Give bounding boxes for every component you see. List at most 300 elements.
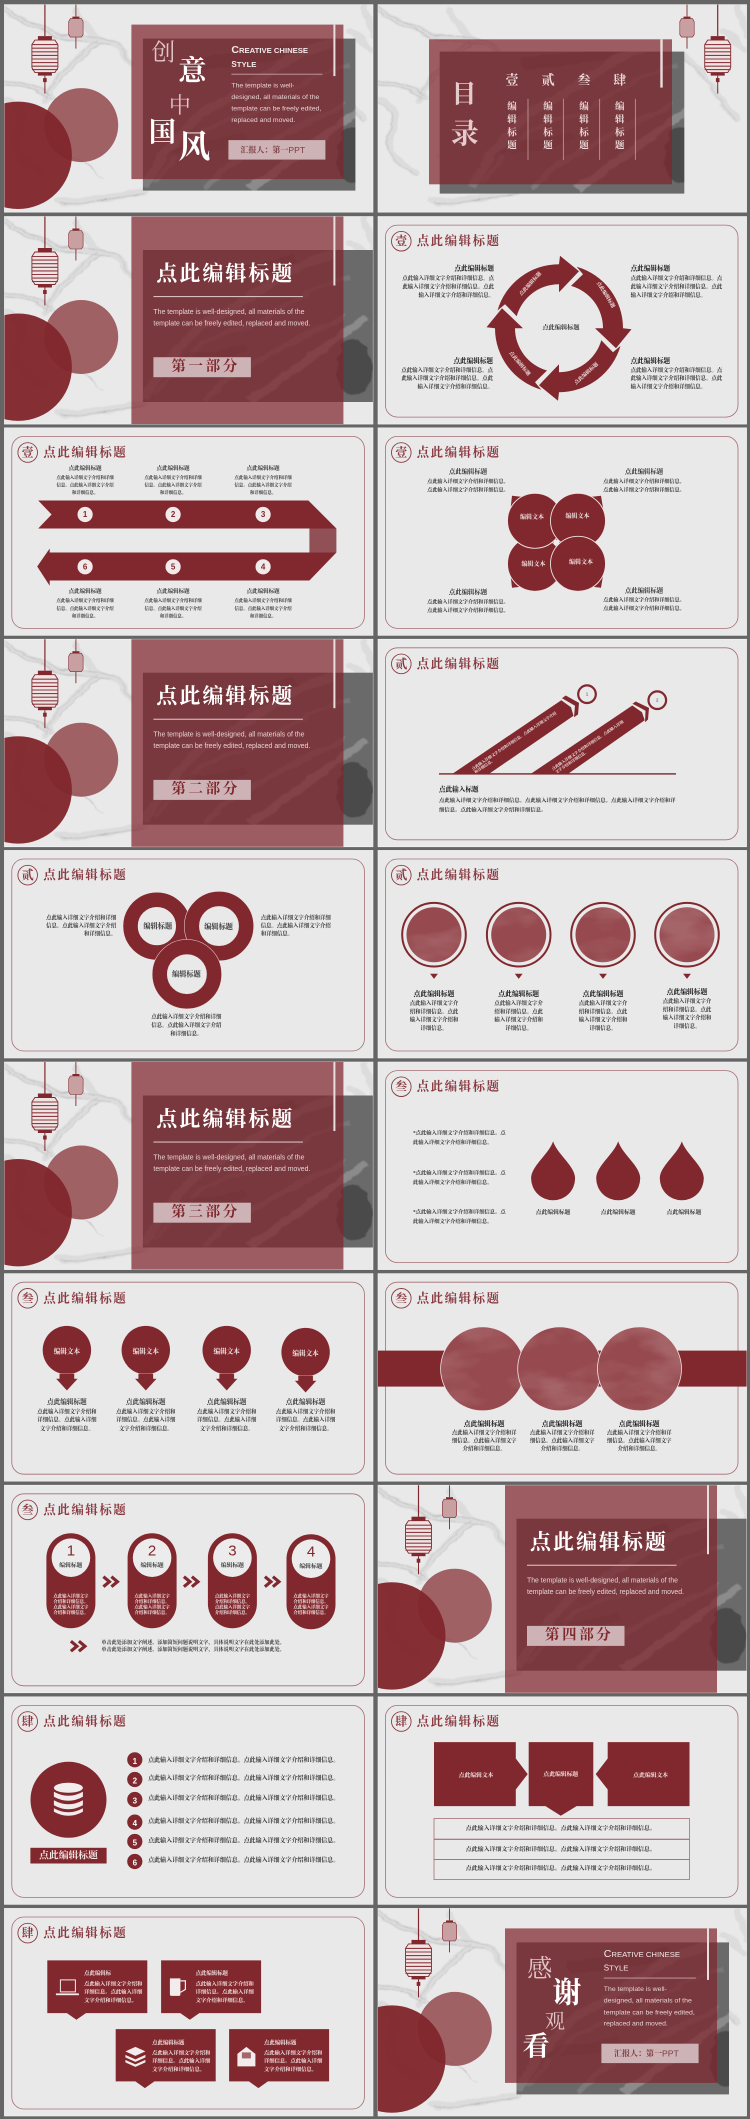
bullet numbers: 3 <box>133 1796 138 1805</box>
petal diagram <box>508 493 606 591</box>
pin four: 点此编辑标题 <box>286 1397 326 1406</box>
numbered markers: 1 <box>586 692 589 697</box>
slide: three rings <box>4 850 373 1058</box>
cycle arrows: 点此编辑标题 <box>518 270 543 297</box>
bar captions: 点此输入详细文字介绍和详细信息。点此输入详细 <box>551 719 624 771</box>
slide: four callout boxes <box>4 1908 373 2116</box>
heading: 点此编辑标题 <box>417 867 501 882</box>
marbled circle fills <box>406 907 714 962</box>
text block three: 点此编辑标题 <box>619 1419 660 1428</box>
text block bottom left: 点此输入详细文字介绍和详细信息。 <box>427 598 509 605</box>
pill two: 介绍和详细信息。 <box>135 1597 170 1604</box>
circle column two: 绍和详细信息。点此 <box>494 1007 544 1015</box>
english description: template can be freely edited, replaced and moved. <box>153 320 310 327</box>
pill three: 点此输入详细文字 <box>215 1592 251 1599</box>
text block top right: 输入详细文字介绍和详细信息。 <box>631 291 706 299</box>
content frame <box>12 1282 364 1474</box>
slide: circles on band <box>378 1274 747 1481</box>
english heading: STYLE <box>231 60 256 69</box>
pill two: 点此输入详细文字 <box>135 1603 170 1610</box>
text block bottom left: 点此输入详细文字介绍和详细信息。 <box>427 607 509 614</box>
callout two: 点此编辑标题 <box>196 1969 229 1977</box>
divider <box>527 1565 676 1566</box>
pin two: 文字介绍和详细信息。 <box>119 1424 173 1432</box>
arrows: chevrons <box>71 1577 279 1651</box>
bottom text: 信息。点此输入详细文字介绍 <box>151 1021 222 1029</box>
slide: water drops <box>378 1062 747 1270</box>
centre label: 点此编辑标题 <box>542 324 580 332</box>
numbered markers: 2 <box>656 698 659 703</box>
bullet text <box>413 1129 506 1225</box>
pill one <box>46 1533 95 1628</box>
heading: 点此编辑标题 <box>417 1079 501 1094</box>
slide: section one <box>0 216 373 424</box>
badge <box>392 654 411 674</box>
cover vertical title: 国 <box>149 118 176 148</box>
contents columns: 辑 <box>579 113 589 125</box>
dark marble panel <box>143 250 373 402</box>
content frame <box>12 1705 364 1897</box>
english description: The template is well-designed, all materials of the <box>153 1154 305 1161</box>
decorative circles <box>0 88 118 209</box>
white vertical bar <box>333 639 335 708</box>
white vertical bar <box>707 1485 709 1554</box>
contents columns: 编 <box>579 101 589 113</box>
step numbers: 5 <box>171 562 176 571</box>
badge <box>392 865 411 885</box>
thank you vertical title: 观 <box>545 2011 565 2033</box>
callout one: 点此输入详细文字介绍和 <box>84 1979 143 1987</box>
decorative circles <box>0 723 118 844</box>
petal labels: 编辑文本 <box>569 558 593 566</box>
icon: small lantern <box>69 5 83 49</box>
icon: big lantern <box>32 5 58 94</box>
petal labels <box>520 512 593 568</box>
white vertical bar <box>660 39 663 88</box>
english paragraph: template can be freely edited, <box>231 105 322 112</box>
large circles <box>441 1327 682 1411</box>
upper text blocks: 信息。点此输入详细文字介绍 <box>145 481 202 488</box>
english paragraph: replaced and moved. <box>604 2020 668 2027</box>
circle column three: 点此输入详细文字介 <box>579 999 628 1007</box>
cycle arrows: 点此编辑标题 <box>507 350 532 377</box>
content frame <box>385 225 738 417</box>
section tag: 第一部分 <box>171 357 240 375</box>
pin three: 详细信息。点此输入详细 <box>197 1416 257 1424</box>
bullet text: *点此输入详细文字介绍和详细信息。点 <box>413 1208 506 1216</box>
circle column four: 绍和详细信息。点此 <box>663 1005 712 1013</box>
pin one: 编辑文本 <box>54 1346 80 1355</box>
bullet numbers: 6 <box>133 1858 138 1867</box>
red translucent panel <box>131 25 343 179</box>
slide: four circles <box>378 850 747 1058</box>
pin two <box>116 1326 176 1432</box>
badge <box>392 1712 411 1731</box>
content frame <box>385 648 738 840</box>
callout four: 点此输入详细文字介绍和 <box>264 2048 323 2056</box>
icon: small lantern <box>69 216 83 260</box>
english paragraph: template can be freely edited, <box>604 2009 695 2016</box>
text block top left: 点此输入详细文字介绍和详细信息。 <box>427 478 509 485</box>
upper text blocks: 点此输入详细文字介绍和详细 <box>235 473 292 480</box>
slide: pills process <box>4 1485 373 1693</box>
text block three: 介绍和详细信息。 <box>618 1444 661 1452</box>
badge: 叁 <box>395 1079 407 1094</box>
bullet numbers: 2 <box>133 1776 138 1785</box>
left text: 点此输入详细文字介绍和详细 <box>46 914 117 922</box>
pin two: 详细信息。点此输入详细 <box>116 1416 176 1424</box>
content frame <box>385 1071 738 1263</box>
text block top right: 点此输入详细文字介绍和详细信息。 <box>603 478 685 485</box>
badge: 叁 <box>395 1290 407 1305</box>
section tag <box>527 1626 624 1646</box>
content frame <box>385 436 738 628</box>
numbered bullets <box>127 1752 142 1869</box>
contents columns: 壹 <box>505 72 519 87</box>
description <box>439 784 676 814</box>
circle column two: 点此输入详细文字介 <box>494 999 544 1007</box>
text block bottom right: 此输入详细文字介绍和详细信息。点此 <box>631 374 723 382</box>
badge <box>18 1923 38 1943</box>
decorative circles <box>0 1146 118 1266</box>
pill three: 介绍和详细信息。 <box>215 1608 250 1615</box>
badge <box>392 1077 411 1096</box>
list text: 点此输入详细文字介绍和详细信息。点此输入详细文字介绍和详细信息。 <box>148 1856 339 1864</box>
decorative circles <box>378 1992 492 2113</box>
slide: section four <box>338 1485 747 1693</box>
folded arrow <box>37 500 336 586</box>
heading: 点此编辑标题 <box>417 1714 501 1729</box>
pin one: 文字介绍和详细信息。 <box>40 1424 94 1432</box>
text block bottom left: 点此输入详细文字介绍和详细信息。点 <box>401 366 494 374</box>
callout four: 点此编辑标题 <box>264 2039 297 2047</box>
description: 点此输入详细文字介绍和详细信息。点此输入详细文字介绍和详细信息。点此输入详细文字介绍和详 <box>439 796 676 804</box>
circle column four: 点此输入详细文字介 <box>663 997 712 1005</box>
pill three: 点此输入详细文字 <box>215 1603 251 1610</box>
decorative circles <box>378 1568 492 1690</box>
english heading: CREATIVE CHINESE <box>231 44 308 56</box>
bottom text: 点此输入详细文字介绍和详细 <box>151 1013 222 1021</box>
upper text blocks: 信息。点此输入详细文字介绍 <box>235 481 292 488</box>
text block three <box>607 1419 672 1452</box>
lower text blocks <box>57 587 292 619</box>
badge: 贰 <box>395 867 407 882</box>
text block top left: 此输入详细文字介绍和详细信息。点此 <box>402 282 495 290</box>
lower text blocks: 和详细信息。 <box>250 612 276 619</box>
pin four: 文字介绍和详细信息。 <box>279 1424 333 1432</box>
bullet text: 此输入详细文字介绍和详细信息。 <box>413 1178 492 1186</box>
contents columns: 编 <box>615 101 625 113</box>
icon: small lantern <box>442 1485 457 1529</box>
presenter box: 汇报人：第一PPT <box>240 144 306 155</box>
pill one: 编辑标题 <box>59 1561 83 1569</box>
english paragraph: designed, all materials of the <box>604 1997 692 2004</box>
lower text blocks: 点此编辑标题 <box>157 587 190 595</box>
red translucent panel <box>505 1928 717 2083</box>
heading: 点此编辑标题 <box>417 656 501 671</box>
pill one: 介绍和详细信息。 <box>53 1608 88 1615</box>
callout one: 文字介绍和详细信息。 <box>84 1996 137 2004</box>
text block two: 细信息。点此输入详细文字 <box>530 1436 595 1444</box>
text block top right: 点此输入详细文字介绍和详细信息。 <box>603 486 685 493</box>
text block bottom right: 点此编辑标题 <box>625 585 664 594</box>
pin four: 详细信息。点此输入详细 <box>276 1416 336 1424</box>
badge <box>392 443 411 462</box>
text block top right: 点此编辑标题 <box>631 264 671 273</box>
description: 点此输入标题 <box>439 784 479 793</box>
content frame <box>385 1282 738 1474</box>
pin four: 点此输入详细文字介绍和 <box>276 1407 336 1415</box>
content frame <box>12 1917 364 2109</box>
numbered markers <box>578 685 666 709</box>
contents columns <box>505 72 626 152</box>
pill two: 2 <box>148 1542 156 1559</box>
section tag: 第四部分 <box>545 1626 613 1644</box>
circle column four: 点此编辑标题 <box>667 987 708 996</box>
text block top left: 点此输入详细文字介绍和详细信息。 <box>427 486 509 493</box>
white vertical bar <box>707 1928 709 1980</box>
bullet text: *点此输入详细文字介绍和详细信息。点 <box>413 1169 506 1177</box>
pill three: 介绍和详细信息。 <box>215 1597 250 1604</box>
text block top right: 点此输入详细文字介绍和详细信息。点 <box>631 274 723 282</box>
pill one: 介绍和详细信息。 <box>53 1597 88 1604</box>
heading: 点此编辑标题 <box>43 867 127 882</box>
ring labels: 编辑标题 <box>172 970 202 979</box>
pin three: 文字介绍和详细信息。 <box>200 1424 254 1432</box>
english paragraph: The template is well- <box>604 1986 667 1993</box>
contents columns: 标 <box>615 127 626 139</box>
dark marble panel <box>143 673 373 825</box>
ring labels <box>143 922 234 979</box>
slide: thank you <box>338 1908 747 2116</box>
lower text blocks: 点此编辑标题 <box>247 587 280 595</box>
lower text blocks: 和详细信息。 <box>72 612 98 619</box>
upper text blocks: 点此输入详细文字介绍和详细 <box>57 473 114 480</box>
badge <box>18 443 38 462</box>
lower text blocks: 信息。点此输入详细文字介绍 <box>57 604 114 611</box>
bullet numbers: 4 <box>133 1819 138 1828</box>
english description: The template is well-designed, all materials of the <box>153 731 305 738</box>
section title: 点此编辑标题 <box>156 262 294 286</box>
slide: section three <box>0 1062 373 1270</box>
badge: 壹 <box>395 233 407 248</box>
dark marble panel <box>143 39 372 191</box>
circle column two: 输入详细文字介绍和 <box>494 1016 544 1024</box>
pin two: 点此编辑标题 <box>126 1397 166 1406</box>
circle column three: 详细信息。 <box>590 1024 616 1032</box>
text block top left: 点此编辑标题 <box>454 264 494 273</box>
text block one: 点此输入详细文字介绍和详 <box>452 1429 517 1437</box>
upper text blocks: 点此编辑标题 <box>157 464 190 472</box>
pill two <box>128 1533 177 1628</box>
section tag <box>153 357 251 377</box>
content frame <box>385 1705 738 1897</box>
text block two: 介绍和详细信息。 <box>541 1444 584 1452</box>
right text: 点此输入详细文字介绍和详细 <box>261 914 331 922</box>
text block two <box>530 1419 595 1452</box>
bullet numbers: 5 <box>133 1838 138 1847</box>
petal labels: 编辑文本 <box>520 513 544 521</box>
pin two: 点此输入详细文字介绍和 <box>116 1407 176 1415</box>
circle column four: 详细信息。 <box>674 1022 700 1030</box>
contents columns: 标 <box>543 127 554 139</box>
text block one <box>452 1419 517 1452</box>
circle column one: 详细信息。 <box>421 1024 447 1032</box>
text block bottom right: 输入详细文字介绍和详细信息。 <box>631 382 706 390</box>
english description: The template is well-designed, all materials of the <box>527 1577 678 1584</box>
text block one: 细信息。点此输入详细文字 <box>452 1436 517 1444</box>
badge: 肆 <box>22 1714 34 1729</box>
divider <box>153 719 303 720</box>
english paragraph: The template is well- <box>231 82 294 89</box>
text block three: 细信息。点此输入详细文字 <box>607 1436 672 1444</box>
lower text blocks: 信息。点此输入详细文字介绍 <box>235 604 292 611</box>
ring diagram <box>130 899 246 1001</box>
list text: 点此输入详细文字介绍和详细信息。点此输入详细文字介绍和详细信息。 <box>148 1794 339 1802</box>
thank you vertical title: 看 <box>522 2031 550 2061</box>
presenter box: 汇报人：第一PPT <box>614 2048 679 2059</box>
pill one: 1 <box>67 1542 75 1559</box>
lower text blocks: 和详细信息。 <box>160 612 186 619</box>
section tag <box>153 780 251 800</box>
pill four: 介绍和详细信息。 <box>293 1608 329 1615</box>
divider <box>231 73 322 75</box>
upper text blocks <box>57 464 292 496</box>
pin one: 点此输入详细文字介绍和 <box>37 1407 97 1415</box>
contents columns: 标 <box>579 127 590 139</box>
text block top right: 点此编辑标题 <box>625 467 664 476</box>
slide: three boxes and table <box>378 1697 747 1904</box>
badge <box>392 231 411 251</box>
upper text blocks: 和详细信息。 <box>160 489 186 496</box>
cover vertical title: 中 <box>169 93 191 118</box>
heading: 点此编辑标题 <box>417 1290 501 1305</box>
slide: folded arrow process <box>4 428 373 635</box>
english description: The template is well-designed, all materials of the <box>153 308 305 316</box>
contents columns: 题 <box>615 140 625 152</box>
box right <box>596 1742 690 1806</box>
english description: template can be freely edited, replaced and moved. <box>527 1589 684 1596</box>
upper text blocks: 点此输入详细文字介绍和详细 <box>145 473 202 480</box>
heading: 点此编辑标题 <box>417 444 501 459</box>
bottom text: 和详细信息。 <box>170 1029 203 1037</box>
circle column one: 点此编辑标题 <box>414 989 455 998</box>
cycle arrows: 点此编辑标题 <box>595 280 617 309</box>
red translucent panel <box>505 1485 717 1693</box>
text block top right <box>603 467 685 494</box>
pill three <box>208 1533 257 1628</box>
cover vertical title <box>149 40 210 165</box>
red translucent panel <box>131 216 343 424</box>
callout one: 详细信息。点此输入详细 <box>84 1988 143 1996</box>
circle column three: 绍和详细信息。点此 <box>579 1007 628 1015</box>
english paragraph: designed, all materials of the <box>231 94 320 101</box>
step numbers: 4 <box>261 562 266 571</box>
box middle: 点此编辑标题 <box>543 1770 578 1778</box>
bullet numbers: 1 <box>133 1756 138 1765</box>
summary text: 单击此处添加文字阐述。添加简短问题说明文字，具体说明文字在此处添加此处。 <box>101 1646 285 1654</box>
text block three: 点此输入详细文字介绍和详 <box>607 1429 672 1437</box>
text block two: 点此编辑标题 <box>542 1419 583 1428</box>
cycle arrows <box>486 256 632 401</box>
pill one: 点此输入详细文字 <box>53 1592 89 1599</box>
text block top left <box>402 264 495 299</box>
step numbers: 1 <box>83 510 88 519</box>
drop labels: 点此编辑标题 <box>667 1208 702 1216</box>
circle column three: 点此编辑标题 <box>583 989 624 998</box>
icon: big lantern <box>32 639 58 728</box>
step numbers: 2 <box>171 510 176 519</box>
contents columns: 编 <box>543 101 553 113</box>
petal labels: 编辑文本 <box>521 560 546 568</box>
circle column four: 输入详细文字介绍和 <box>663 1014 712 1022</box>
pill four: 编辑标题 <box>299 1562 323 1570</box>
pin four: 编辑文本 <box>292 1348 319 1357</box>
diagonal bar two <box>531 702 649 774</box>
text block bottom left: 点此编辑标题 <box>453 356 493 365</box>
icon: cup <box>170 1978 185 1996</box>
text block one: 介绍和详细信息。 <box>463 1444 506 1452</box>
box left <box>434 1742 528 1806</box>
callout three: 点此编辑标题 <box>152 2039 185 2047</box>
circle column two <box>487 903 550 1032</box>
pin one: 详细信息。点此输入详细 <box>37 1416 97 1424</box>
pill four: 介绍和详细信息。 <box>293 1597 329 1604</box>
badge: 肆 <box>22 1925 34 1940</box>
red translucent panel <box>131 639 343 847</box>
contents columns: 编 <box>507 101 517 113</box>
callout one <box>47 1960 147 2020</box>
section title: 点此编辑标题 <box>530 1530 668 1554</box>
table text: 点此输入详细文字介绍和详细信息。点此输入详细文字介绍和详细信息。 <box>466 1864 656 1872</box>
heading: 点此编辑标题 <box>43 444 127 459</box>
upper text blocks: 点此编辑标题 <box>69 464 102 472</box>
icon: small lantern <box>69 639 83 683</box>
icon: laptop <box>56 1980 79 1995</box>
pill four <box>286 1534 336 1629</box>
cover vertical title: 风 <box>178 129 210 165</box>
english heading: STYLE <box>604 1963 628 1972</box>
contents columns: 辑 <box>543 113 553 125</box>
text block top left: 点此编辑标题 <box>449 467 488 476</box>
badge <box>18 865 38 885</box>
left text: 和详细信息。 <box>84 930 116 938</box>
english heading: CREATIVE CHINESE <box>604 1948 680 1960</box>
callout two <box>161 1960 261 2020</box>
english description: template can be freely edited, replaced and moved. <box>153 743 310 750</box>
cycle arrows: 点此编辑标题 <box>573 361 600 386</box>
pill four: 点此输入详细文字 <box>293 1592 329 1599</box>
pin three <box>197 1326 257 1432</box>
step numbers: 3 <box>261 510 266 519</box>
callout two: 点此输入详细文字介绍和 <box>196 1979 255 1987</box>
right text: 和详细信息。 <box>261 930 293 938</box>
icon: small lantern <box>442 1908 457 1952</box>
text block bottom left: 点此编辑标题 <box>449 587 488 596</box>
circle column three <box>571 903 635 1032</box>
ring labels: 编辑标题 <box>204 922 234 931</box>
icon: big lantern <box>406 1908 432 1997</box>
contents columns: 标 <box>507 127 518 139</box>
thank you vertical title: 感 <box>527 1955 552 1983</box>
circle column one: 绍和详细信息。点此 <box>410 1007 459 1015</box>
lower text blocks: 点此编辑标题 <box>69 587 102 595</box>
text block one: 点此编辑标题 <box>464 1419 505 1428</box>
list text: 点此输入详细文字介绍和详细信息。点此输入详细文字介绍和详细信息。 <box>148 1774 339 1782</box>
circle column two: 点此编辑标题 <box>498 989 539 998</box>
section title: 点此编辑标题 <box>156 1107 294 1131</box>
callout two: 文字介绍和详细信息。 <box>196 1996 249 2004</box>
